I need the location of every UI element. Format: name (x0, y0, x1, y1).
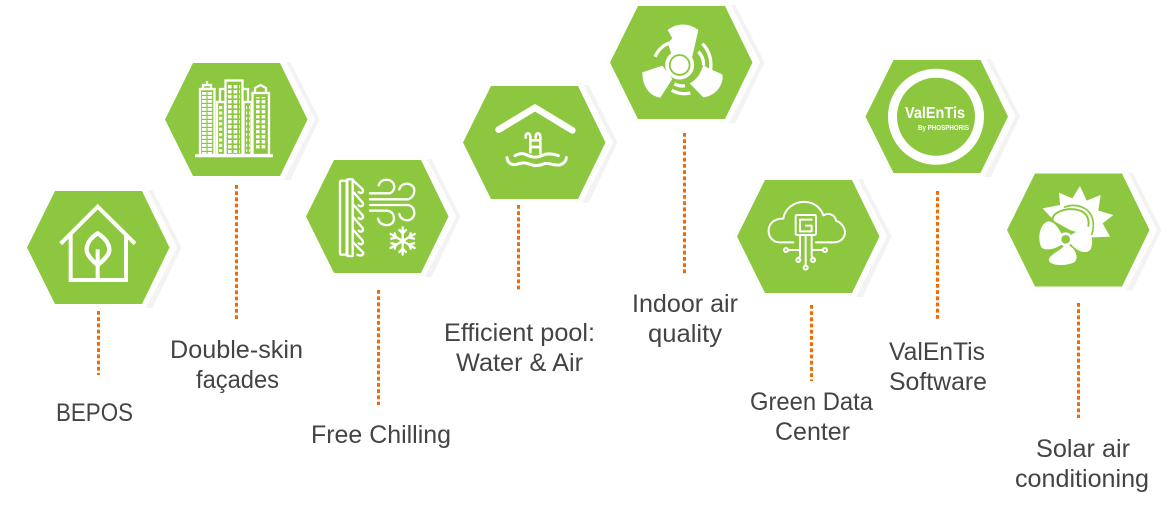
connector (517, 205, 520, 290)
label (889, 338, 987, 396)
label (444, 319, 595, 377)
icon: ventilation fan (642, 24, 723, 98)
icon: ValEnTis logo: By PHOSPHORIS (918, 125, 969, 132)
label (170, 336, 303, 394)
icon: ValEnTis logo: ValEnTis (905, 105, 965, 122)
hexagon (24, 188, 182, 308)
icon: solar fan (1039, 186, 1113, 265)
label: ValEnTis (889, 338, 985, 366)
label: quality (648, 320, 723, 348)
label: Green Data (750, 388, 873, 416)
connector (683, 133, 686, 275)
label: façades (196, 366, 279, 394)
item: Solar air conditioning (1004, 170, 1162, 493)
icon: house with leaf (61, 207, 135, 280)
label: Solar air (1036, 435, 1130, 463)
hexagon (734, 177, 892, 297)
label: Center (775, 418, 850, 446)
hexagon (162, 60, 320, 180)
label: Free Chilling (311, 421, 451, 449)
connector (97, 311, 100, 375)
item: ValEnTis Software (862, 57, 1020, 396)
connector (936, 191, 939, 320)
connector (235, 185, 238, 320)
label: Indoor air (632, 290, 738, 318)
label (1015, 435, 1149, 493)
label: Water & Air (456, 349, 583, 377)
hexagon (303, 157, 460, 277)
connector (810, 305, 813, 381)
hexagon (862, 57, 1020, 177)
item: Efficient pool (444, 83, 618, 377)
label: Software (889, 368, 987, 396)
connector (1077, 303, 1080, 418)
item: Green Data Center (734, 177, 892, 446)
label: conditioning (1015, 465, 1149, 493)
hexagon (460, 83, 618, 203)
label (632, 290, 738, 348)
label (750, 388, 873, 446)
icon: ValEnTis logo (892, 73, 980, 160)
icon: radiator, wind and snowflake (340, 179, 415, 256)
item: Double-skin facades (162, 60, 320, 394)
item: BEPOS (24, 188, 182, 427)
hexagon (1004, 170, 1162, 290)
icon: covered pool (499, 108, 572, 166)
item: Indoor air quality (607, 3, 764, 348)
item: Free Chilling (303, 157, 460, 449)
label: Efficient pool: (444, 319, 595, 347)
connector (377, 290, 380, 405)
label: BEPOS (56, 399, 133, 427)
label: Double-skin (170, 336, 303, 364)
icon: cloud chip (769, 202, 845, 270)
icon: buildings (195, 80, 273, 156)
hexagon (607, 3, 764, 123)
